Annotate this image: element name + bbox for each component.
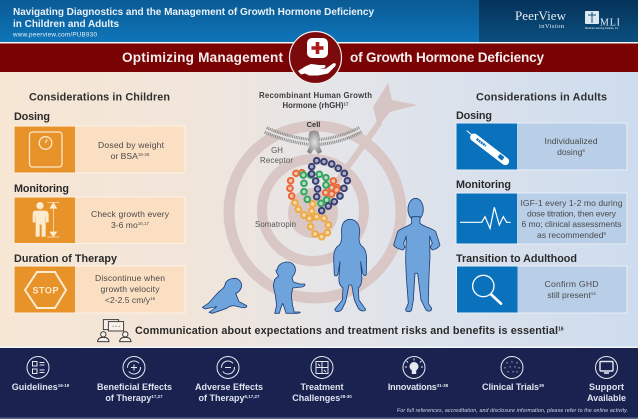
icon: stop sign: STOP — [32, 286, 58, 296]
text: dosed by weight: 16-26 — [138, 152, 150, 157]
panel: considerations in adults — [456, 92, 627, 313]
card: monitoring children — [14, 197, 185, 244]
text: check growth: 16,17 — [138, 221, 150, 226]
heading: considerations in children: Considerations in Children — [29, 92, 170, 104]
logo: MLI: Medical Learning Institute, Inc. — [585, 26, 619, 30]
card: dosing children — [14, 126, 185, 173]
icon: stop sign — [25, 272, 66, 308]
footer item: support available: Support — [589, 382, 624, 392]
logo: MLI: MLI — [600, 18, 620, 28]
footer item: innovations: Innovations — [388, 382, 437, 392]
figure: adult — [394, 198, 440, 312]
logo: PeerView: PeerView — [515, 8, 567, 23]
text: confirm GHD: 14 — [591, 291, 596, 296]
footer item: adverse effects — [195, 356, 263, 403]
figure: crawling baby — [202, 278, 247, 313]
footer item: treatment challenges: 28-30 — [340, 394, 352, 399]
footer item: treatment challenges: Treatment — [300, 382, 344, 392]
logo: PeerView: inVision — [539, 23, 565, 30]
subheading: duration of therapy: Duration of Therapy — [14, 253, 117, 265]
footer item: guidelines: 16-19 — [58, 383, 70, 388]
footer item: treatment challenges: Challenges — [292, 393, 340, 403]
text: dosed by weight: Dosed by weight — [98, 140, 165, 150]
heading: recombinant hGH — [259, 91, 372, 110]
text: confirm GHD — [544, 279, 598, 300]
heading: considerations in adults: Considerations in Adults — [476, 92, 607, 104]
figure: girl — [334, 219, 367, 312]
label: Somatropin: Somatropin — [255, 220, 296, 229]
footer item: adverse effects: of Therapy — [198, 393, 244, 403]
text: confirm GHD: still present — [547, 290, 591, 300]
footnote: For full references, accreditation, and disclosure information, please refer to the online activity. — [397, 408, 628, 414]
icon: injection pen — [467, 131, 505, 161]
section banner — [0, 42, 638, 72]
icon: magnifying glass — [473, 275, 501, 304]
subheading: monitoring: Monitoring — [14, 183, 69, 195]
subheading: monitoring: Monitoring — [456, 179, 511, 191]
card: monitoring adults — [456, 193, 627, 244]
text: IGF-1 monitoring — [520, 198, 623, 240]
text: IGF-1 monitoring: 6 — [603, 231, 606, 236]
icon: pulse line — [460, 207, 511, 228]
footer item: beneficial effects: Beneficial Effects — [97, 382, 172, 392]
footer item: clinical trials: Clinical Trials — [482, 382, 539, 392]
panel: considerations in children — [14, 92, 185, 313]
icon: child with height measure — [33, 202, 59, 237]
footer item: innovations: 31-38 — [437, 383, 449, 388]
text: dosed by weight: or BSA — [111, 151, 138, 161]
text: discontinue: Discontinue when — [95, 273, 165, 283]
footer item: innovations — [388, 356, 449, 392]
logo: MLI — [585, 11, 620, 30]
text: IGF-1 monitoring: 6 mo; clinical assessments — [522, 219, 622, 229]
text: check growth: Check growth every — [91, 209, 170, 219]
text: IGF-1 monitoring: as recommended — [537, 230, 603, 240]
subheading: dosing: Dosing — [14, 111, 50, 123]
subheading: dosing: Dosing — [456, 110, 492, 122]
text: communication statement: Communication about expectations and treatment risks and benefits is essential — [135, 325, 558, 337]
footer item: beneficial effects: 17,27 — [151, 394, 163, 399]
heading: recombinant hGH: Hormone (rhGH) — [282, 101, 344, 110]
text: confirm GHD: Confirm GHD — [544, 279, 598, 289]
logo: PeerView — [515, 8, 567, 30]
header title: in Children and Adults — [13, 19, 119, 30]
card: transition — [456, 266, 627, 313]
figure: toddler — [273, 262, 305, 313]
card: duration of therapy — [14, 266, 185, 313]
heading: recombinant hGH: Recombinant Human Growth — [259, 91, 372, 100]
background — [0, 72, 638, 348]
footer item: support available — [587, 356, 626, 403]
footer item: treatment challenges — [292, 356, 352, 403]
footer item: support available: Available — [587, 393, 626, 403]
footer item: clinical trials — [482, 356, 544, 392]
footer item: adverse effects: Adverse Effects — [195, 382, 263, 392]
text: individualized dosing: 6 — [582, 148, 585, 153]
footer item: beneficial effects: of Therapy — [105, 393, 151, 403]
text: individualized dosing — [544, 136, 598, 157]
label: GH Receptor — [260, 146, 293, 165]
card: dosing adults — [456, 123, 627, 170]
text: IGF-1 monitoring: IGF-1 every 1-2 mo during — [520, 198, 623, 208]
header title — [12, 7, 374, 38]
text: communication statement: 16 — [558, 326, 564, 332]
text: discontinue — [95, 273, 165, 305]
text: discontinue: 16 — [150, 296, 156, 301]
icon: scale — [30, 132, 62, 167]
icon: two people talking — [98, 320, 131, 342]
figures: baby to adult silhouettes — [202, 198, 440, 313]
footer item: guidelines — [12, 356, 70, 392]
text: check growth: 3-6 mo — [111, 220, 138, 230]
text: individualized dosing: dosing — [557, 147, 582, 157]
text: IGF-1 monitoring: dose titration, then every — [527, 208, 617, 218]
text: individualized dosing: Individualized — [544, 136, 598, 146]
banner text — [122, 50, 544, 65]
icon: hand holding medical cross — [290, 32, 342, 84]
text: check growth — [91, 209, 170, 230]
target rings and arrow — [229, 83, 417, 298]
banner text: of Growth Hormone Deficiency — [350, 50, 544, 65]
footer bar — [0, 346, 638, 419]
footer item: clinical trials: 39 — [539, 383, 544, 388]
header title: www.peerview.com/PUB930 — [12, 32, 97, 38]
footer item: adverse effects: 6,17,27 — [244, 394, 260, 399]
text: discontinue: growth velocity — [100, 284, 160, 294]
footer item: guidelines: Guidelines — [12, 382, 58, 392]
banner text: Optimizing Management — [122, 50, 283, 65]
diagram: somatropin helix beads — [287, 158, 350, 239]
label: GH Receptor: Receptor — [260, 156, 293, 165]
label: Cell: Cell — [307, 120, 320, 129]
diagram: cell membrane and receptor — [266, 129, 361, 154]
header title: Navigating Diagnostics and the Management of Growth Hormone Deficiency — [13, 7, 374, 18]
header bar — [0, 0, 638, 42]
heading: recombinant hGH: 17 — [344, 102, 349, 106]
label: GH Receptor: GH — [271, 146, 283, 155]
footer item: beneficial effects — [97, 356, 172, 403]
text: dosed by weight — [98, 140, 165, 161]
text: discontinue: <2-2.5 cm/y — [105, 295, 150, 305]
subheading: transition to adulthood: Transition to Adulthood — [456, 253, 577, 265]
